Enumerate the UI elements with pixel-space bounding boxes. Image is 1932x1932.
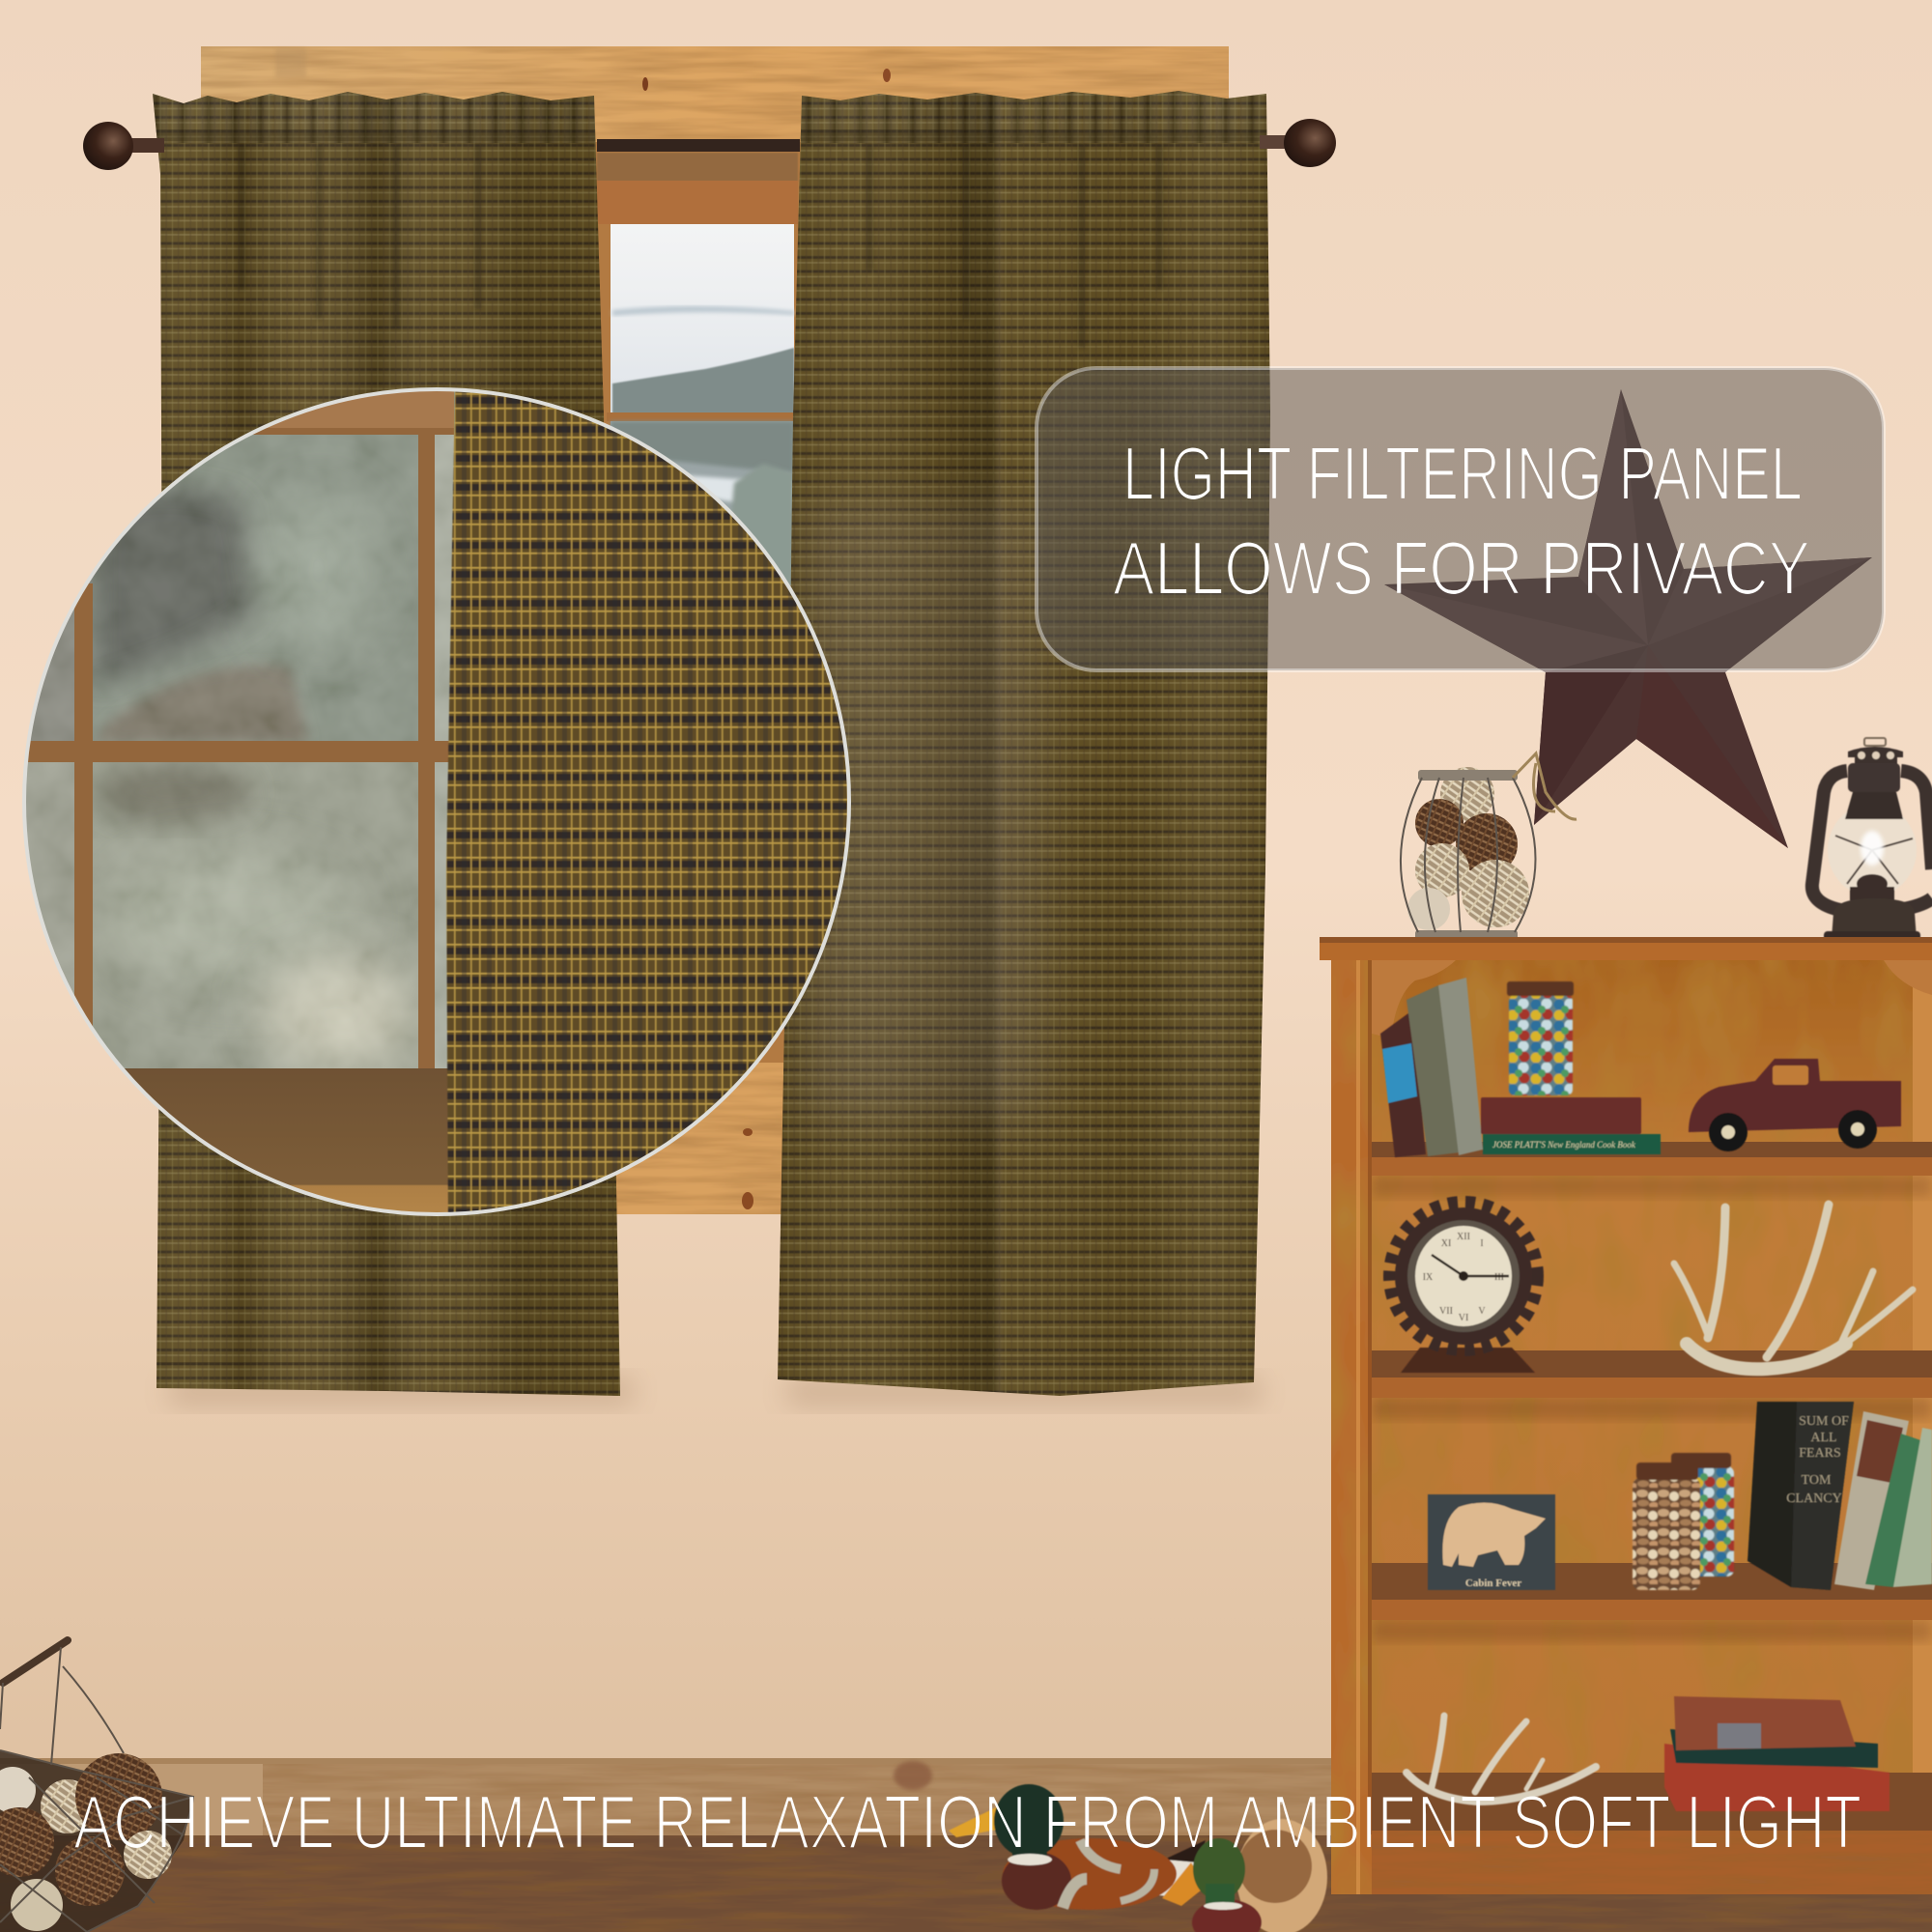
window: frame, glass and view <box>594 139 802 1214</box>
stacked novels, shelf three: CLANCY <box>1786 1492 1842 1506</box>
wood valance board <box>201 46 1229 153</box>
magnified fabric plaid <box>446 386 869 1227</box>
metal barn star <box>1384 389 1872 848</box>
stacked novels, shelf three: SUM OF <box>1799 1414 1849 1429</box>
curtain shadows on wall <box>169 1377 1261 1406</box>
left post <box>1331 960 1372 1894</box>
stacked books, bottom shelf <box>1664 1696 1889 1811</box>
mallard two <box>1192 1899 1262 1932</box>
shelf 3 <box>1372 1563 1932 1600</box>
wire basket with woven balls <box>0 1640 193 1932</box>
gear clock: IX <box>1423 1272 1434 1283</box>
window sash and muntins <box>19 388 454 1077</box>
stacked novels, shelf three: ALL <box>1810 1431 1837 1445</box>
shelf 2 <box>1372 1350 1932 1378</box>
mallard one <box>1159 1860 1203 1898</box>
wooden decoy <box>1236 1819 1327 1932</box>
wire jar with twine balls <box>1401 753 1577 942</box>
corner brackets <box>1372 960 1456 1038</box>
top board <box>1320 937 1932 960</box>
gear clock: III <box>1494 1272 1504 1283</box>
callout panel with text <box>1037 368 1884 670</box>
bottom shelf <box>1372 1773 1932 1831</box>
stacked novels, shelf three: FEARS <box>1799 1446 1841 1461</box>
callout line two: ALLOWS FOR PRIVACY <box>1113 526 1810 611</box>
deer antler, bottom shelf <box>1406 1716 1596 1802</box>
right curtain panel <box>773 87 1275 1401</box>
curtain rod with finials <box>83 119 1336 170</box>
gear clock: I <box>1480 1238 1484 1249</box>
deer antler, shelf two <box>1674 1205 1913 1369</box>
books, shelf one <box>1380 978 1661 1157</box>
gear clock: VII <box>1439 1306 1453 1317</box>
gear clock: V <box>1478 1306 1486 1317</box>
window scene through glass <box>26 392 456 1068</box>
bookcase <box>1320 937 1932 1894</box>
gear clock: XII <box>1457 1232 1470 1242</box>
magnified detail circle <box>19 386 869 1227</box>
stacked novels, shelf three <box>1747 1402 1932 1590</box>
duck decoys <box>949 1784 1327 1932</box>
gear clock: VI <box>1459 1313 1468 1323</box>
Cabin Fever bear sign: Cabin Fever <box>1465 1577 1521 1589</box>
gear clock: XI <box>1441 1238 1451 1249</box>
Cabin Fever bear sign <box>1428 1494 1555 1590</box>
translucent rounded panel <box>1037 368 1884 670</box>
window sill <box>125 1068 448 1212</box>
stacked novels, shelf three: TOM <box>1802 1473 1832 1488</box>
wood floor <box>0 1835 1932 1932</box>
gear clock <box>1390 1203 1537 1373</box>
left curtain panel <box>145 87 628 1401</box>
back panel <box>1372 960 1932 1839</box>
marble jar, shelf one <box>1507 981 1574 1095</box>
oil lantern <box>1812 738 1932 941</box>
books, shelf one: JOSE PLATT'S New England Cook Book <box>1492 1140 1636 1150</box>
shelf 1 <box>1372 1142 1932 1157</box>
compartment shadows <box>1372 1176 1932 1197</box>
baseboard <box>0 1758 1335 1837</box>
toy truck <box>1689 1059 1901 1151</box>
glass jars, shelf three <box>1633 1453 1734 1590</box>
